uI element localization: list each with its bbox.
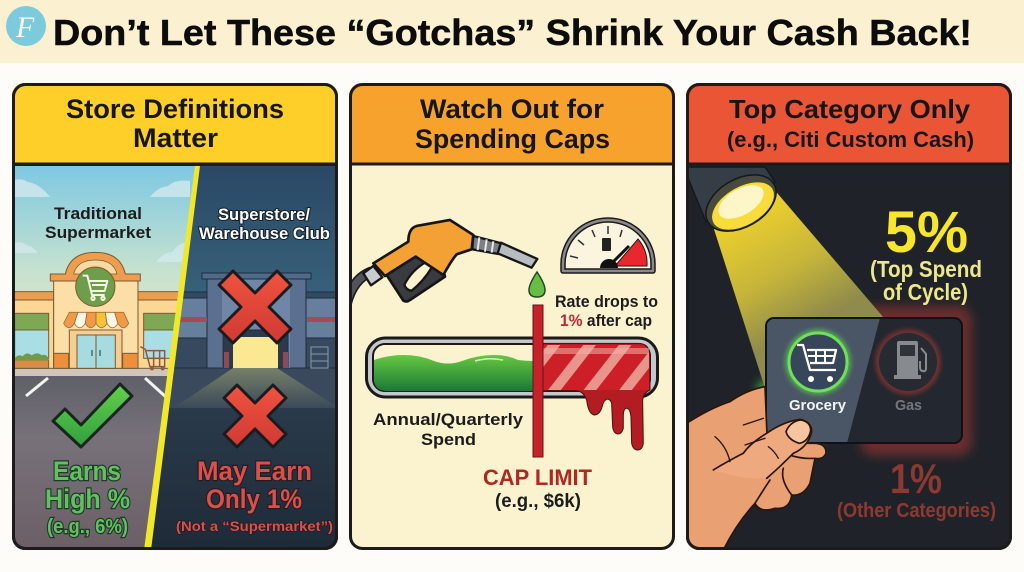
text: 1 percent other categories: 1% bbox=[890, 455, 942, 502]
light cone bbox=[182, 368, 330, 403]
text: cap limit: CAP LIMIT bbox=[483, 465, 593, 490]
text: 5 percent top spend: 5% bbox=[885, 200, 968, 265]
icon: hand holding card bbox=[687, 387, 826, 550]
label: traditional supermarket: Traditional bbox=[54, 205, 142, 223]
text: rate drops to 1 percent after cap bbox=[555, 293, 658, 330]
label: superstore: Superstore/ bbox=[218, 206, 310, 224]
text: rate drops to 1 percent after cap: 1% after cap bbox=[560, 312, 652, 330]
icon: large red X bbox=[219, 271, 291, 343]
text: earns high percent: (e.g., 6%) bbox=[47, 516, 128, 538]
text: may earn only 1 percent: Only 1% bbox=[206, 484, 302, 514]
text: may earn only 1 percent: (Not a “Supermarket”) bbox=[176, 518, 333, 534]
text: 5 percent top spend: of Cycle) bbox=[883, 279, 968, 305]
icon: fuel nozzle bbox=[347, 220, 537, 303]
label: traditional supermarket: Supermarket bbox=[45, 224, 152, 242]
icon: green drop bbox=[529, 272, 545, 297]
warehouse building bbox=[174, 272, 335, 368]
text: cap limit bbox=[484, 470, 592, 511]
text: 1 percent other categories bbox=[837, 455, 996, 522]
cap limit bar bbox=[533, 305, 543, 457]
red over-cap section with drips bbox=[543, 343, 650, 450]
text: may earn only 1 percent bbox=[176, 456, 333, 534]
text: may earn only 1 percent: May Earn bbox=[197, 456, 312, 486]
panel heading band: Watch Out for bbox=[420, 94, 605, 124]
panel heading band: Matter bbox=[133, 123, 219, 153]
label: superstore bbox=[199, 206, 330, 243]
scene: traditional supermarket bbox=[12, 166, 202, 552]
grocery icon bbox=[785, 329, 851, 395]
panel heading band bbox=[349, 83, 675, 166]
green spend level bbox=[374, 355, 538, 391]
text: annual or quarterly spend bbox=[373, 410, 524, 449]
text: earns high percent: High % bbox=[45, 484, 130, 514]
chart: spend tube bbox=[366, 305, 658, 457]
supermarket building bbox=[12, 252, 188, 370]
panel heading band bbox=[686, 83, 1012, 166]
text: cap limit: (e.g., $6k) bbox=[495, 491, 581, 512]
parking lines bbox=[26, 378, 167, 398]
flashlight bbox=[689, 166, 777, 232]
panel: top category only bbox=[686, 83, 1012, 550]
panel heading band: Store Definitions bbox=[66, 94, 284, 124]
icon: green check bbox=[53, 384, 132, 447]
icon: fuel gauge bbox=[563, 220, 653, 271]
text: 5 percent top spend bbox=[870, 200, 982, 305]
label: traditional supermarket bbox=[45, 205, 152, 242]
label: gas: Gas bbox=[895, 397, 922, 414]
shopping cart bbox=[140, 347, 165, 370]
gas icon bbox=[875, 329, 941, 395]
scene: superstore or warehouse club bbox=[140, 166, 340, 552]
text: 1 percent other categories: (Other Categories) bbox=[837, 500, 996, 522]
text: rate drops to 1 percent after cap: Rate drops to bbox=[555, 293, 658, 311]
cart icon on sign bbox=[83, 276, 107, 300]
panel: store definitions bbox=[12, 83, 340, 552]
divider stripe bbox=[144, 166, 200, 550]
header banner bbox=[0, 0, 1024, 63]
logo badge: F bbox=[15, 11, 35, 44]
panel heading band bbox=[12, 83, 338, 166]
panel: spending caps bbox=[347, 83, 675, 550]
icon: small red X bbox=[224, 385, 286, 447]
text: earns high percent bbox=[45, 456, 130, 538]
text: annual or quarterly spend: Spend bbox=[421, 430, 476, 449]
card glow: red and green bbox=[758, 306, 972, 456]
text: annual or quarterly spend: Annual/Quarterly bbox=[373, 410, 524, 429]
logo badge bbox=[6, 6, 46, 46]
text: 5 percent top spend: (Top Spend bbox=[870, 256, 982, 282]
panel heading band: Top Category Only bbox=[729, 94, 971, 124]
striped awning bbox=[64, 312, 129, 328]
panel heading band: (e.g., Citi Custom Cash) bbox=[727, 127, 974, 152]
text: earns high percent: Earns bbox=[53, 456, 121, 486]
spotlight beam bbox=[714, 192, 883, 386]
title: Don’t Let These “Gotchas” Shrink Your Cash Back! bbox=[53, 12, 972, 53]
label: superstore: Warehouse Club bbox=[199, 225, 330, 243]
label: grocery: Grocery bbox=[789, 397, 847, 414]
credit card bbox=[766, 318, 962, 443]
panel heading band: Spending Caps bbox=[415, 124, 610, 154]
